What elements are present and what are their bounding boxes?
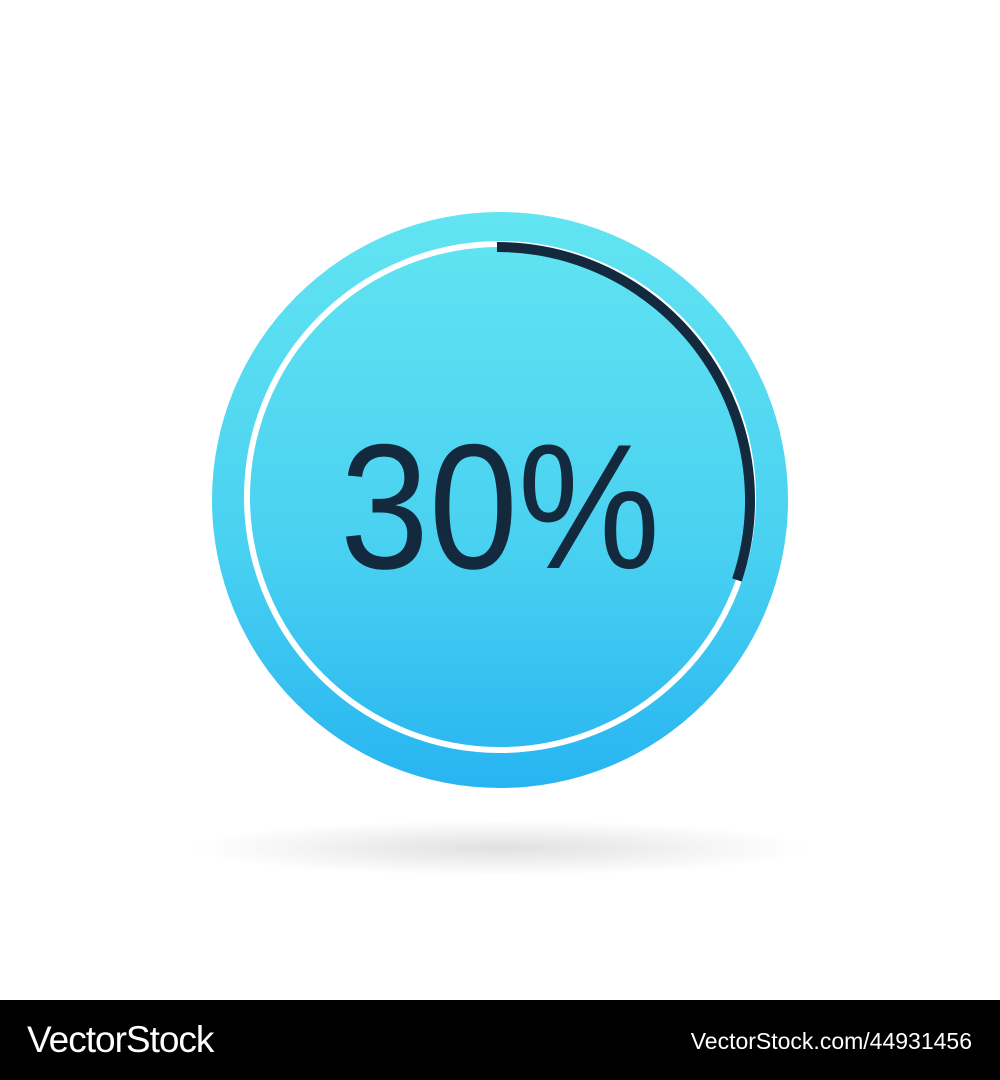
blue disc <box>212 212 788 788</box>
progress arc 30% <box>497 247 750 580</box>
value label: 30% <box>340 407 660 606</box>
white ring <box>247 244 753 750</box>
shadow <box>190 820 810 876</box>
footer: watermark bar: VectorStock.com/44931456 <box>691 1028 972 1054</box>
footer: watermark bar <box>0 1000 1000 1080</box>
footer: watermark bar: VectorStock <box>27 1019 213 1060</box>
